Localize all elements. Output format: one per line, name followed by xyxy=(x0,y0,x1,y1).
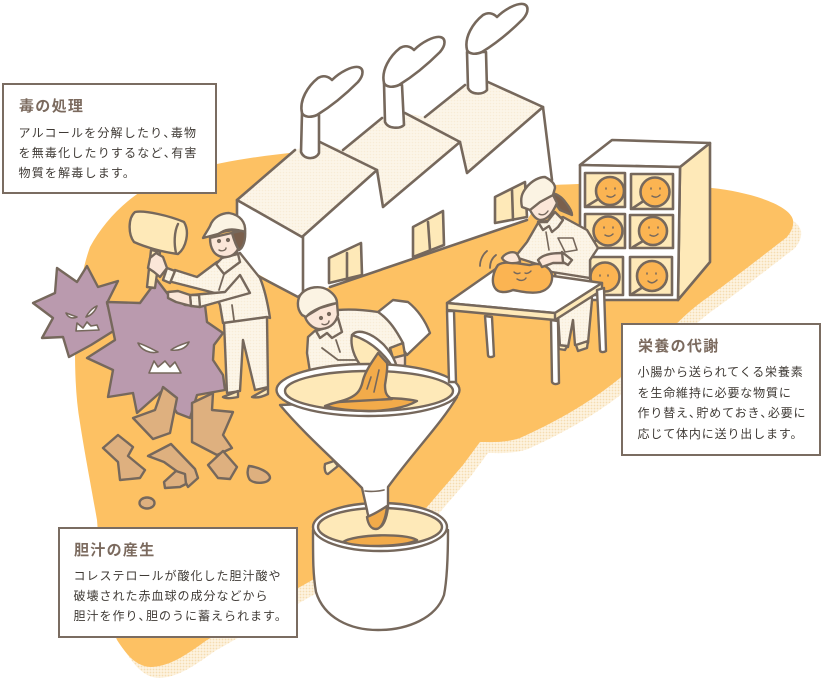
funnel cone xyxy=(280,397,457,528)
drip xyxy=(367,506,387,529)
cell 3 xyxy=(585,214,625,248)
chimney 1 xyxy=(301,113,319,158)
mallet handle xyxy=(147,250,160,288)
shelf front xyxy=(580,165,680,300)
shoes xyxy=(558,341,588,351)
hat xyxy=(203,213,245,238)
torso xyxy=(515,217,598,278)
hand xyxy=(168,291,191,306)
table top xyxy=(447,268,602,313)
cell 2 xyxy=(631,174,673,209)
text block: 物質を解毒します。 xyxy=(18,166,136,180)
roof 1 xyxy=(237,142,377,237)
body xyxy=(307,310,403,372)
smiles xyxy=(600,188,660,283)
brown shards xyxy=(103,387,270,508)
hand xyxy=(393,355,405,370)
cup body xyxy=(313,530,448,630)
text block xyxy=(74,569,288,623)
text block: を無毒化したりするなど、有害 xyxy=(18,146,198,160)
roof 2 xyxy=(320,113,460,207)
collar xyxy=(538,212,563,232)
text block: 小腸から送られてくる栄養素 xyxy=(638,365,804,379)
hair xyxy=(232,230,245,250)
smoke 1 xyxy=(301,67,362,117)
stream xyxy=(338,353,392,402)
worker 2 pouring xyxy=(298,287,430,474)
panel: 栄養の代謝 xyxy=(621,323,821,456)
bile xyxy=(343,535,417,546)
heading: 胆汁の産生 xyxy=(74,542,156,559)
pan interior xyxy=(351,334,395,375)
cuffs xyxy=(163,268,200,307)
ponytail xyxy=(550,193,572,215)
collar xyxy=(316,318,342,338)
smoke 2 xyxy=(383,37,444,87)
factory walls xyxy=(237,107,552,297)
heading: 栄養の代謝 xyxy=(638,338,720,355)
cuff xyxy=(562,252,572,265)
pocket xyxy=(546,232,577,252)
cup rim xyxy=(313,503,447,551)
big virus xyxy=(87,280,225,418)
pan rim xyxy=(352,332,397,373)
text block: を生命維持に必要な物質に xyxy=(638,386,792,400)
mallet head xyxy=(130,212,187,254)
cuff xyxy=(390,343,405,358)
text block: 応じて体内に送り出します。 xyxy=(638,426,803,440)
bucket xyxy=(378,300,430,355)
cell 5 xyxy=(590,257,623,295)
face xyxy=(305,303,338,329)
cell 4 xyxy=(630,215,673,248)
hat xyxy=(521,177,555,210)
bun xyxy=(493,263,552,293)
window 2 xyxy=(413,211,444,257)
roof 3 xyxy=(405,82,543,173)
legs xyxy=(555,272,592,347)
text block: コレステロールが酸化した胆汁酸や xyxy=(74,569,282,583)
text block: 胆汁を作り、胆のうに蓄えられます。 xyxy=(74,609,288,623)
shelf side xyxy=(678,143,710,300)
panel: 毒の処理 xyxy=(2,83,217,194)
hand on handle xyxy=(148,253,167,277)
collar xyxy=(216,254,240,274)
left hand xyxy=(502,252,520,263)
text block: 作り替え、貯めておき、必要に xyxy=(638,406,806,420)
window 1 xyxy=(329,243,362,283)
right hand xyxy=(538,253,568,267)
cup inner xyxy=(318,508,442,546)
liver halftone shadow xyxy=(83,163,801,678)
table front edges xyxy=(447,283,602,320)
text block xyxy=(638,365,806,440)
funnel xyxy=(276,353,460,529)
window 3 xyxy=(495,182,527,223)
chimney 2 xyxy=(384,83,404,128)
shoe xyxy=(325,461,338,474)
face xyxy=(210,232,240,257)
text block: アルコールを分解したり、毒物 xyxy=(18,126,197,140)
pool xyxy=(325,398,417,411)
smoke 3 xyxy=(466,4,528,54)
factory xyxy=(237,4,552,297)
worker 1 with mallet xyxy=(130,212,270,398)
heading: 毒の処理 xyxy=(19,98,84,115)
cup xyxy=(313,503,448,630)
inner xyxy=(285,371,453,411)
rim xyxy=(276,364,460,416)
text block xyxy=(18,126,198,180)
legs xyxy=(224,317,268,393)
shoes xyxy=(223,388,268,398)
face xyxy=(530,195,557,220)
motion lines xyxy=(480,251,496,268)
panel: 胆汁の産生 xyxy=(58,527,298,638)
spout band xyxy=(365,490,384,491)
text block: 破壊された赤血球の成分などから xyxy=(74,589,269,603)
cell 1 xyxy=(585,173,625,207)
worker 3 at table xyxy=(447,177,606,384)
cell 6 xyxy=(630,257,672,295)
hat xyxy=(298,287,337,317)
torso xyxy=(168,253,270,323)
shelf xyxy=(580,140,710,300)
front arm xyxy=(192,275,250,307)
small virus xyxy=(33,266,118,357)
shelf top xyxy=(580,140,710,167)
chimney 3 xyxy=(467,52,487,94)
table legs xyxy=(447,288,606,384)
liver silhouette xyxy=(75,152,793,667)
